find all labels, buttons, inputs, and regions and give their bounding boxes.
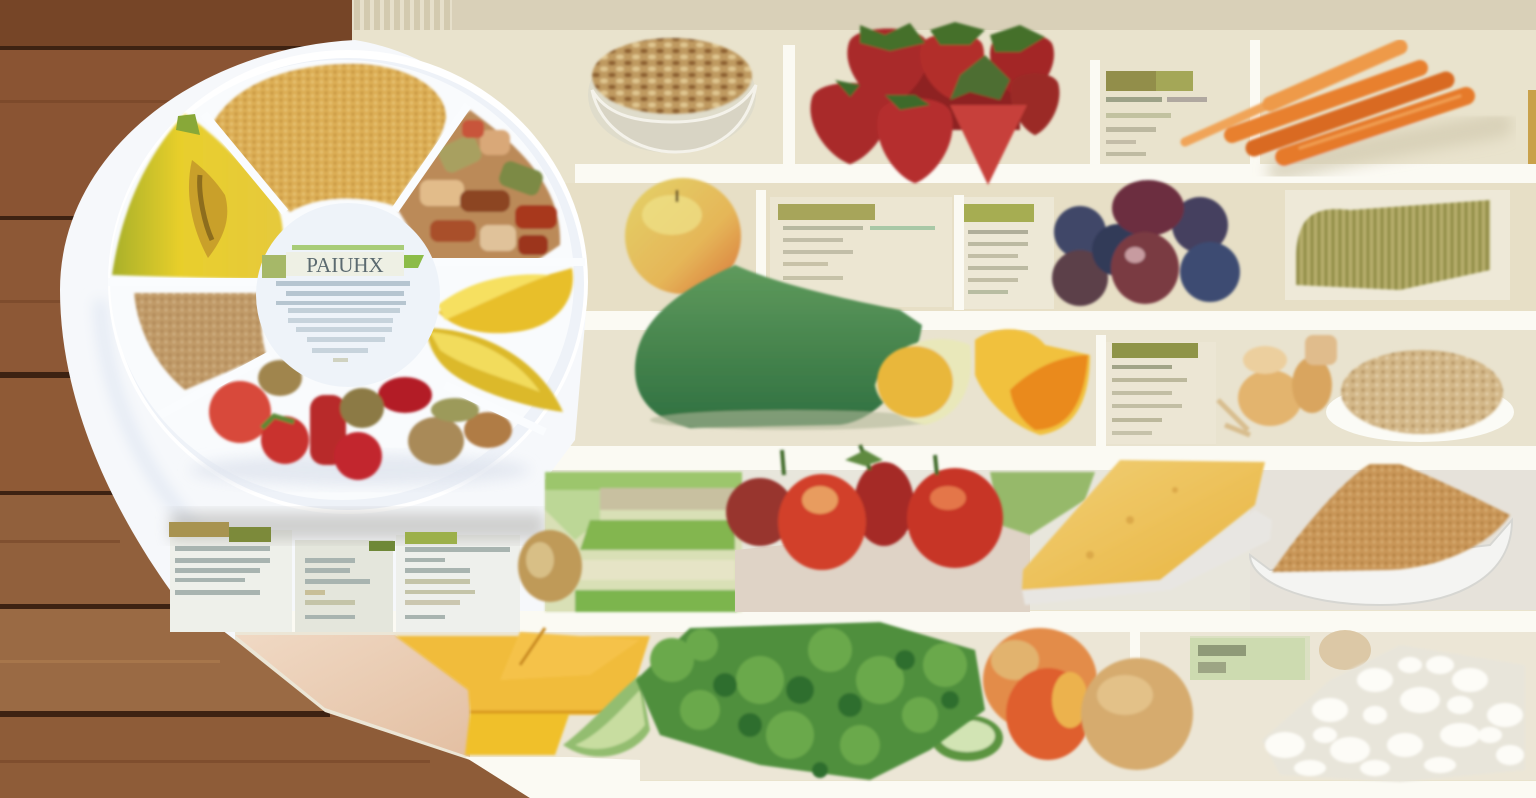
plate section: bananas [426, 268, 573, 412]
icon: celery [545, 472, 742, 612]
icon: onion [518, 530, 582, 602]
icon: green lettuce [636, 622, 985, 780]
plate white spokes [108, 105, 585, 432]
icon: red apples [726, 445, 1003, 570]
icon: cheese wedge [1022, 460, 1272, 605]
icon: avocado [635, 265, 930, 430]
icon: lettuce behind apples [990, 472, 1095, 535]
icon: peaches [983, 628, 1097, 760]
icon: bowl of oats [588, 37, 756, 153]
white plate sweep [60, 40, 587, 640]
icon: citrus halves [875, 329, 1090, 435]
shelf row backgrounds [230, 183, 1536, 780]
icon: plums [1052, 180, 1240, 306]
plate centre label [256, 203, 440, 387]
panel: nut row label [1106, 342, 1216, 444]
panel: left text cards [169, 512, 545, 632]
icon: green pasta [1296, 200, 1490, 290]
plate centre label: PAIUHX [306, 253, 384, 277]
plate [108, 50, 588, 514]
plate section: yellow melon [112, 114, 283, 280]
plate section: tan grain [134, 293, 266, 390]
icon: round potato [1081, 658, 1193, 770]
icon: cheese slices [395, 628, 650, 755]
icon: cutting board [735, 520, 1030, 612]
icon: strawberries [810, 22, 1059, 185]
wooden table [0, 0, 540, 798]
plate section: mixed nuts [398, 110, 560, 262]
icon: cucumber slices [563, 675, 1003, 761]
panel: white bean label [1190, 630, 1371, 680]
panel: carrot label [1106, 71, 1207, 156]
plate section: grain [212, 64, 446, 212]
icon: plate of grains [1326, 350, 1514, 442]
icon: peach cloth [235, 635, 470, 757]
panel: plums label [964, 197, 1054, 309]
plate section: fruit and nuts [190, 360, 530, 486]
icon: bread rolls [1218, 335, 1337, 435]
top stripes [352, 0, 452, 30]
icon: yellow apple [625, 178, 741, 294]
row five floor with white edge [170, 611, 640, 798]
icon: bowl of brown grain [1250, 464, 1512, 605]
panel: apple row label [770, 197, 952, 307]
icon: carrots [1185, 46, 1500, 170]
icon: white beans [1262, 645, 1525, 782]
